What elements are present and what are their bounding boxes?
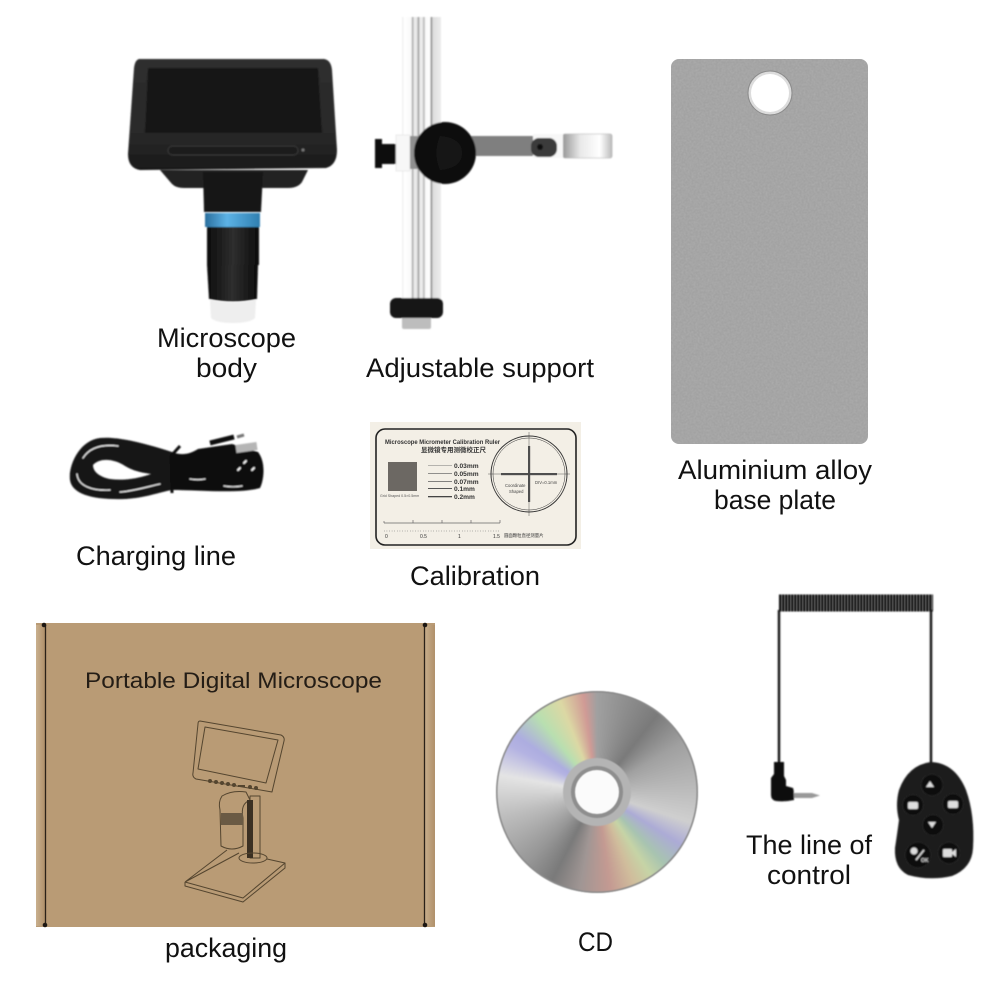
plug body (771, 762, 794, 801)
item: calibration card (370, 422, 581, 549)
label: calibration: Calibration (410, 561, 540, 591)
label: aluminium base plate: base plate (714, 485, 836, 515)
item: packaging box (36, 623, 435, 927)
ruler numbers (385, 534, 500, 540)
ruler numbers: 0.5 (420, 534, 427, 540)
rod (402, 17, 441, 302)
label: aluminium base plate (678, 455, 873, 515)
screen (145, 68, 322, 133)
left wire (778, 610, 780, 764)
indicator light (302, 148, 304, 152)
label: microscope body: Microscope (157, 323, 296, 353)
ring bracket (533, 134, 563, 158)
box title: Portable Digital Microscope (85, 668, 382, 693)
ring holder (563, 134, 612, 158)
left cable loop (70, 438, 172, 499)
box face (36, 623, 435, 927)
left flap (36, 625, 45, 926)
line scale: 0.2mm (454, 494, 475, 501)
ruler (384, 520, 500, 531)
label: packaging: packaging (165, 933, 287, 963)
card chinese title: 显微镜专用测微校正尺 (421, 445, 486, 454)
small screw (531, 138, 557, 157)
grid caption: Grid Shaped 0.5×0.5mm (380, 494, 419, 498)
reticle label (505, 480, 558, 494)
micro usb tip (237, 435, 244, 437)
label: CD: CD (578, 927, 613, 957)
card (370, 422, 581, 549)
label: microscope body: body (196, 353, 258, 383)
card border (376, 429, 576, 545)
label: control line (746, 830, 873, 890)
left screw (375, 139, 396, 168)
cable tie (171, 446, 180, 493)
clear tip (210, 300, 256, 323)
line scale: 0.1mm (454, 486, 475, 493)
base collar (390, 298, 443, 318)
box corners (42, 623, 427, 927)
remote body (895, 762, 973, 878)
reticle label: DIV=0.1mm (535, 480, 558, 485)
item: CD disc (496, 691, 698, 893)
dot scale caption: 圆面颗粒直径测量片 (504, 532, 544, 539)
neck (203, 172, 263, 212)
big knob (414, 122, 476, 184)
line scale: 0.07mm (454, 479, 479, 486)
plate hole opening (751, 74, 789, 112)
card title: Microscope Micrometer Calibration Ruler (385, 439, 500, 446)
label: control line: control (767, 860, 851, 890)
item: charging cable (70, 435, 264, 499)
disc hub (563, 758, 631, 826)
box illustration (185, 721, 285, 902)
disc inner ring (571, 766, 623, 818)
grid square (388, 462, 417, 491)
label: microscope body (157, 323, 296, 383)
line scale: 0.05mm (454, 471, 479, 478)
rod end (402, 316, 431, 329)
lens barrel (207, 265, 258, 302)
plate hole rim (748, 71, 792, 115)
clamp plate (410, 136, 430, 169)
control buttons (168, 146, 298, 155)
remote icons (908, 781, 958, 864)
reticle label: Coordinate (505, 483, 526, 488)
knurled grip (207, 227, 259, 265)
remote buttons (902, 774, 964, 868)
reticle label: Shaped (509, 489, 524, 494)
coiled cable (779, 594, 933, 612)
blue ring (205, 213, 260, 227)
label: charging cable: Charging line (76, 541, 236, 571)
item: control line (771, 603, 973, 878)
remote icons: OK (921, 858, 929, 864)
plug tip (794, 793, 820, 798)
right cable bundle (172, 444, 264, 491)
knob highlight (436, 136, 462, 170)
ruler numbers: 0 (385, 534, 388, 540)
reticle circle (488, 432, 570, 516)
clamp (396, 135, 410, 171)
rear housing (160, 170, 308, 188)
usb plug (236, 446, 257, 449)
right wire (930, 610, 932, 764)
line scale (428, 463, 479, 501)
right flap (424, 625, 435, 926)
ruler numbers: 1 (458, 534, 461, 540)
label: control line: The line of (746, 830, 873, 860)
screen housing (128, 59, 337, 170)
line scale: 0.03mm (454, 463, 479, 470)
cable highlights (77, 445, 254, 492)
ruler numbers: 1.5 (493, 534, 500, 540)
small screw head (537, 144, 543, 150)
box fold lines (46, 625, 424, 926)
item: microscope body (128, 59, 337, 323)
plate (671, 59, 868, 444)
label: aluminium base plate: Aluminium alloy (678, 455, 873, 485)
label: adjustable support: Adjustable support (366, 353, 595, 383)
micro usb plug (210, 437, 234, 443)
item: adjustable support (375, 17, 612, 329)
arm (470, 136, 538, 156)
item: aluminium base plate (671, 59, 868, 444)
disc hole (575, 770, 619, 814)
